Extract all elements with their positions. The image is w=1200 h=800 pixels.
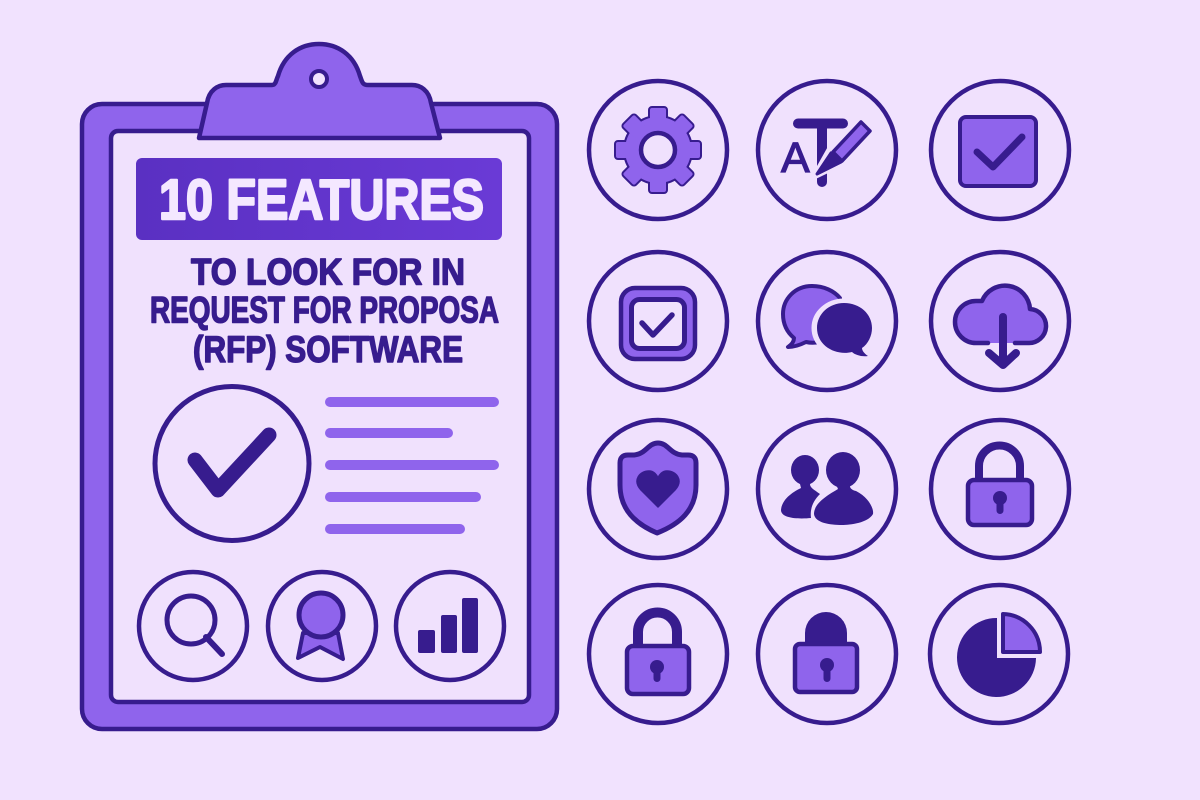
icon: bar chart	[396, 572, 504, 680]
icon: shield with heart	[589, 420, 727, 558]
title banner: 10 FEATURES	[159, 168, 484, 232]
title banner	[136, 158, 502, 240]
clipboard clip	[199, 44, 440, 138]
icon: checkbox	[931, 81, 1069, 219]
subtitle: REQUEST FOR PROPOSA	[150, 290, 499, 330]
paper sheet	[111, 131, 529, 702]
icon: text edit pencil: A	[781, 134, 810, 182]
icon: padlock solid shackle	[758, 585, 896, 723]
icon: speech bubbles	[758, 252, 896, 390]
icon: text edit pencil	[758, 81, 896, 219]
icon: cloud download	[931, 252, 1069, 390]
subtitle: (RFP) SOFTWARE	[193, 329, 463, 370]
text placeholder lines	[325, 397, 499, 534]
large check circle	[155, 386, 309, 540]
icon: two people	[758, 420, 896, 558]
subtitle	[150, 252, 499, 370]
icon: award ribbon	[268, 572, 376, 680]
icon: padlock second	[589, 585, 727, 723]
icon: framed checkbox	[589, 252, 727, 390]
icon: padlock	[931, 420, 1069, 558]
icon: magnifier	[139, 572, 247, 680]
icon: pie chart	[930, 585, 1068, 723]
clipboard board	[82, 104, 557, 729]
panel: clipboard	[82, 44, 557, 729]
subtitle: TO LOOK FOR IN	[191, 252, 465, 292]
icon: gear	[589, 81, 727, 219]
